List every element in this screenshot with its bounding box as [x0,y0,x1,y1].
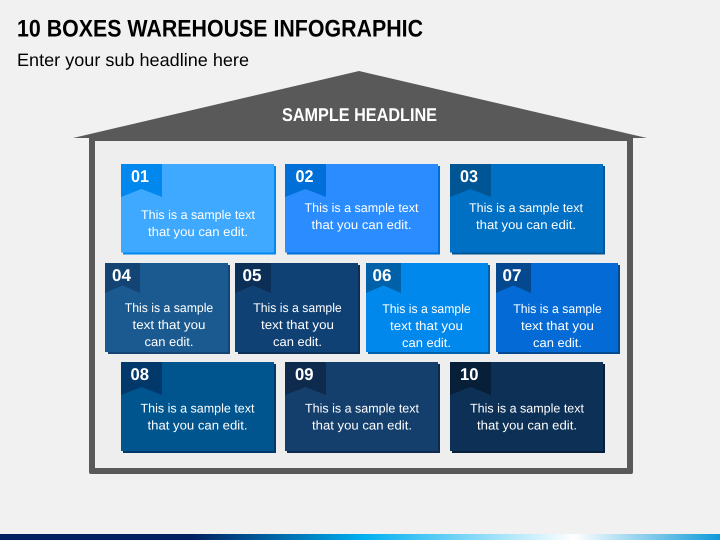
box 09: This is a sample text [305,402,419,416]
box 06 [366,263,490,354]
box 08: that you can edit. [148,418,248,432]
box 08 [121,362,276,453]
box 02 [285,164,440,254]
box 02: This is a sample text [304,201,419,215]
box 02: that you can edit. [312,218,412,232]
box 07: text that you [521,319,594,333]
box 08: This is a sample text [140,402,255,416]
box 05: 05 [242,266,262,285]
box 09: 09 [295,365,314,384]
box 05 [235,263,360,354]
box 03: that you can edit. [476,218,576,232]
box 10: This is a sample text [470,402,584,416]
box 07 [496,263,620,354]
box 08: 08 [130,365,149,384]
box 09 [285,362,440,453]
roof headline: SAMPLE HEADLINE [282,104,437,125]
box 01 [121,164,276,254]
warehouse interior [95,141,627,468]
box 01: that you can edit. [148,225,248,239]
box 07: can edit. [533,336,582,350]
box 04: 04 [112,266,132,285]
box 01: 01 [131,167,149,186]
box 04 [105,263,230,354]
box 06: can edit. [402,336,451,350]
warehouse building [73,71,647,474]
box 07: This is a sample [513,302,602,316]
subtitle: Enter your sub headline here [17,50,249,70]
box 06: This is a sample [382,302,471,316]
box 10: that you can edit. [477,418,577,432]
box 06: text that you [390,319,463,333]
footer gradient bar [0,534,720,540]
box 03 [450,164,605,254]
title: 10 BOXES WAREHOUSE INFOGRAPHIC [17,16,423,42]
warehouse walls [89,138,633,474]
box 01: This is a sample text [141,208,255,222]
box 03: 03 [460,167,478,186]
box 07: 07 [502,266,522,285]
box 04: This is a sample [125,301,213,315]
box 03: This is a sample text [469,201,583,215]
box 10: 10 [460,365,478,384]
box 04: text that you [132,318,206,332]
box 05: This is a sample [253,301,342,315]
box 09: that you can edit. [312,418,412,432]
box 05: can edit. [273,335,322,349]
box 05: text that you [261,318,334,332]
box 02: 02 [296,167,314,186]
box 10 [450,362,605,453]
box 06: 06 [372,266,392,285]
roof [73,71,647,141]
box 04: can edit. [144,335,194,349]
